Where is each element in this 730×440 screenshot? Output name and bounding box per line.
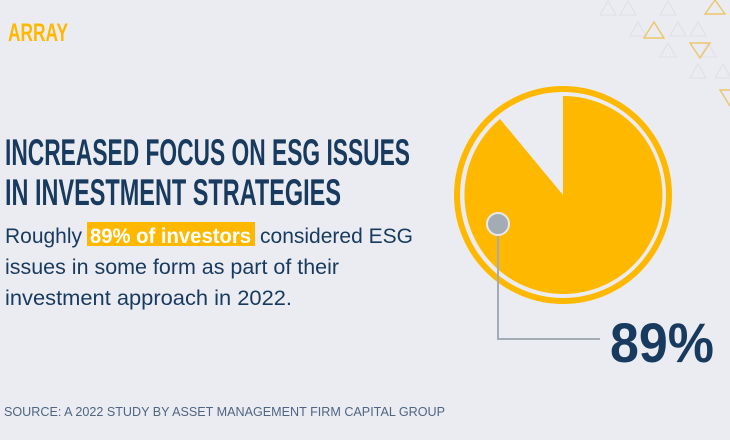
body text: considered ESG: [260, 225, 413, 248]
title: IN INVESTMENT STRATEGIES: [5, 172, 341, 213]
body text: 89% of investors: [90, 225, 251, 248]
body text: issues in some form as part of their: [5, 256, 339, 279]
title: [5, 132, 410, 213]
body text: Roughly: [5, 225, 82, 248]
body text: investment approach in 2022.: [5, 287, 292, 310]
body text: [5, 222, 413, 310]
callout line with dot: [487, 213, 600, 339]
title: INCREASED FOCUS ON ESG ISSUES: [5, 132, 410, 173]
pie chart 89%: [457, 89, 669, 301]
source: SOURCE: A 2022 STUDY BY ASSET MANAGEMENT FIRM CAPITAL GROUP: [4, 404, 445, 419]
decorative triangles pattern: [600, 0, 730, 106]
logo: ARRAY: [8, 19, 68, 47]
big number: 89%: [610, 311, 714, 374]
